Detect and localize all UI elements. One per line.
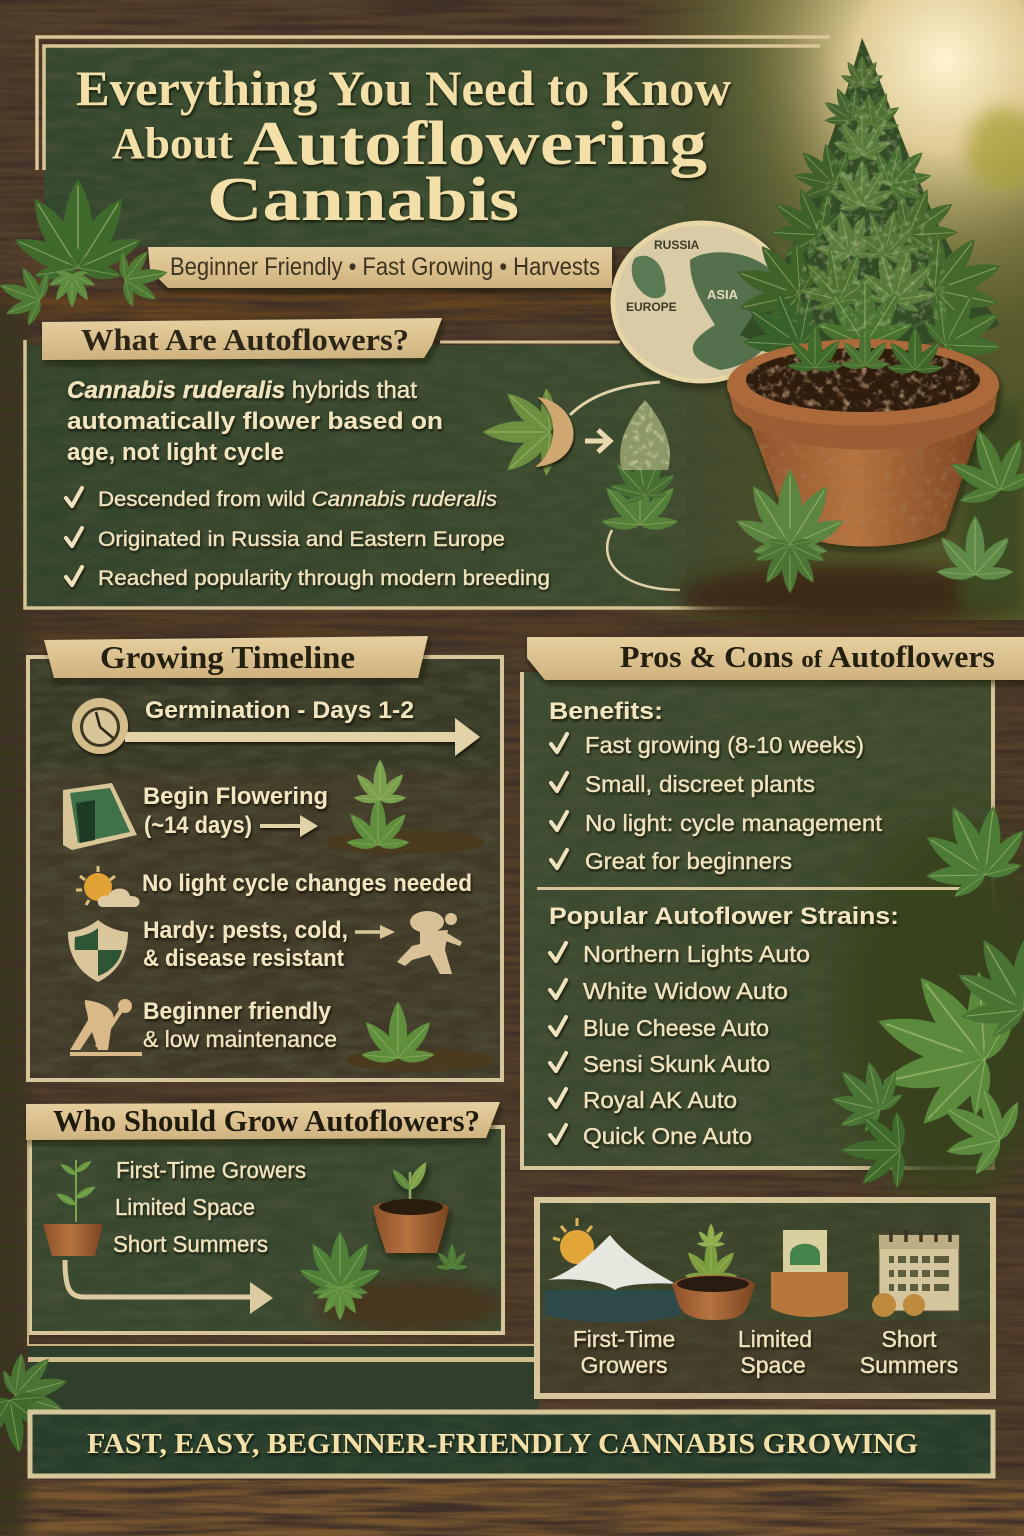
step: hardy: Hardy: pests, cold, [143,917,348,944]
list: who should grow [113,1157,306,1257]
map of Russia, Europe and Asia: ASIA [707,287,739,302]
definition text: Cannabis ruderalis hybrids that [67,377,417,404]
panel: growing timeline [28,636,502,1080]
list: popular strains: Royal AK Auto [583,1087,737,1113]
list: benefits: Great for beginners [585,848,792,874]
list: benefits: Fast growing (8-10 weeks) [585,732,864,758]
heading: title [76,60,731,234]
icon: calendar [872,1230,959,1317]
map of Russia, Europe and Asia [613,223,789,381]
subtitle ribbon [148,247,612,288]
labels: scenarios: Short [882,1326,937,1352]
heading tag: growing timeline: Growing Timeline [100,639,355,675]
plant bud [719,38,1022,391]
list: who should grow: First-Time Growers [116,1157,306,1183]
icon: left corner cannabis leaves [0,179,173,329]
labels: scenarios: Space [740,1352,806,1378]
step: hardy: & disease resistant [143,945,344,972]
checklist: origins [66,488,550,590]
labels: scenarios: First-Time [573,1326,675,1352]
labels: scenarios: Limited [738,1326,812,1352]
map of Russia, Europe and Asia: RUSSIA [654,238,700,252]
step: begin flowering: (~14 days) [144,812,252,839]
list: popular strains: Quick One Auto [583,1123,752,1149]
heading tag: what are autoflowers: What Are Autoflowers? [81,322,409,357]
list: popular strains [549,903,899,1149]
step: beginner friendly: & low maintenance [143,1026,337,1052]
list: popular strains: Northern Lights Auto [583,941,810,967]
list: who should grow: Limited Space [115,1194,255,1220]
step: begin flowering [63,760,485,854]
terracotta pot [727,339,999,546]
icon: seedling in pot with arrow [43,1159,273,1314]
definition text: automatically flower based on [67,408,443,435]
definition text [67,377,443,466]
checklist: origins: Descended from wild Cannabis ruderalis [98,488,498,511]
step: no light cycle changes [76,866,472,907]
step: no light cycle changes: No light cycle changes needed [142,870,472,897]
heading: title: Cannabis [207,166,519,234]
icon: bottom left foliage [0,1341,78,1459]
soil mound [680,400,1024,625]
heading tag: who should grow: Who Should Grow Autoflowers? [53,1103,480,1138]
icon: mountain and sun [545,1218,680,1322]
list: benefits: No light: cycle management [585,810,883,836]
heading tag: growing timeline [44,636,428,678]
icon: leaf and moon to bud diagram [482,382,681,590]
panel: pros and cons [522,637,1024,1200]
step: beginner friendly [70,998,495,1071]
list: benefits: Benefits: [549,698,663,725]
footer banner [30,1412,993,1476]
panel: what are autoflowers [25,318,816,608]
list: popular strains: Blue Cheese Auto [583,1015,769,1041]
list: benefits: Small, discreet plants [585,771,815,797]
labels: scenarios [573,1326,958,1378]
list: popular strains: Sensi Skunk Auto [583,1051,770,1077]
step: germination with clock and arrow [72,697,480,756]
panel: who should grow [26,1102,535,1345]
heading: title: Autoflowering [243,110,707,178]
panel: autoflower scenarios [537,1200,993,1396]
glowing sunlit background and foliage [620,0,1024,620]
step: hardy [68,911,462,982]
illustration: potted autoflower plant [680,38,1024,625]
lower plant leaves over the soil [786,325,944,374]
icon: potted plant [672,1223,755,1320]
labels: scenarios: Growers [581,1352,667,1378]
list: popular strains: White Widow Auto [583,978,788,1004]
heading tag: pros and cons: Pros & Cons of Autoflowers [620,639,995,674]
icon: leafy plant [297,1231,468,1320]
heading: title: Everything You Need to Know [76,60,731,116]
map of Russia, Europe and Asia: EUROPE [626,300,677,314]
footer banner: FAST, EASY, BEGINNER-FRIENDLY CANNABIS GROWING [87,1428,918,1460]
list: popular strains: Popular Autoflower Strains: [549,903,899,930]
step: begin flowering: Begin Flowering [143,783,328,810]
icon: stump with seed packet [771,1230,848,1317]
checklist: origins: Reached popularity through modern breeding [98,567,550,590]
labels: scenarios: Summers [860,1352,958,1378]
foliage: right side leaves [813,782,1024,1190]
checklist: origins: Originated in Russia and Eastern Europe [98,528,505,551]
heading tag: what are autoflowers [42,318,442,360]
heading: title: About [112,119,233,168]
icon: potted seedling [373,1159,449,1253]
foreground plant [732,414,1024,594]
definition text: age, not light cycle [67,439,284,466]
heading tag: pros and cons [527,637,1024,680]
step: germination with clock and arrow: Germination - Days 1-2 [145,697,414,724]
title panel [37,37,834,247]
list: benefits [549,698,883,874]
list: who should grow: Short Summers [113,1231,268,1257]
step: beginner friendly: Beginner friendly [143,998,332,1025]
subtitle ribbon: Beginner Friendly • Fast Growing • Harvests [170,253,600,281]
lower left green band [28,1347,538,1410]
